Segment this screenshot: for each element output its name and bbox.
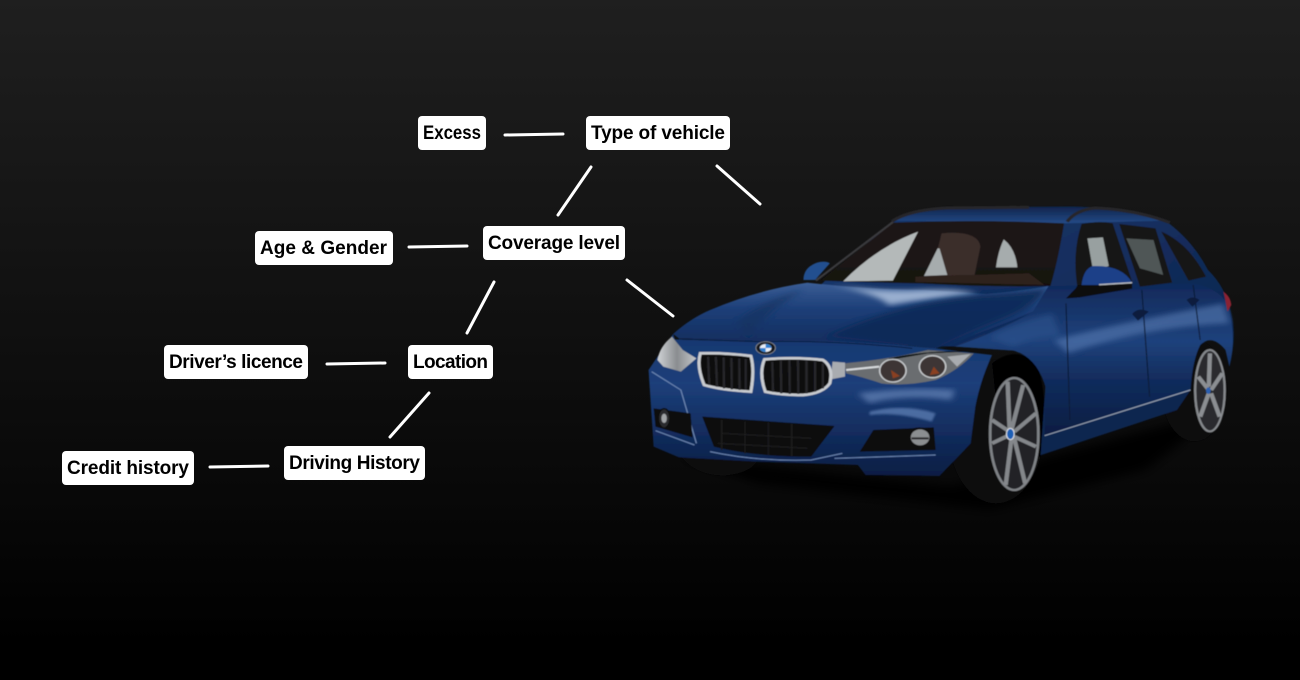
fender reflection (990, 313, 1060, 347)
hood crease shade (737, 290, 803, 337)
tail light (1224, 292, 1231, 312)
lower grille (702, 417, 835, 457)
front-left tyre (681, 457, 757, 475)
connector lines (210, 134, 760, 467)
badge (756, 342, 775, 354)
hood lip (679, 339, 912, 348)
car body silhouette (757, 207, 1234, 455)
side windows (1075, 222, 1206, 288)
side sill stripe (1045, 390, 1190, 436)
hood (673, 283, 1048, 348)
left headlight (658, 337, 696, 372)
label: Driving History (284, 446, 425, 480)
front tyre and wheel arch (949, 354, 1045, 503)
label: Location: Location (413, 352, 488, 373)
kidney grille left (699, 353, 753, 392)
label: Credit history: Credit history (67, 458, 189, 479)
right mirror (1066, 266, 1132, 298)
ground shadow (679, 410, 1224, 510)
illustration: blue estate car (648, 206, 1234, 494)
label: Excess (418, 116, 486, 150)
front fascia (649, 334, 992, 476)
label: Age & Gender: Age & Gender (260, 238, 388, 259)
sunshade reflection (843, 232, 918, 281)
roof rails (892, 207, 1170, 223)
label: Coverage level: Coverage level (488, 233, 620, 254)
right headlight (844, 350, 974, 384)
seats (926, 233, 980, 276)
bumper highlight (858, 389, 955, 403)
door handles (1132, 298, 1199, 321)
hood shaded right panel (827, 288, 1047, 348)
kidney grille right (762, 358, 831, 395)
sill (1041, 390, 1190, 455)
label: Credit history (62, 451, 194, 485)
label: Excess: Excess (423, 123, 481, 144)
door shut lines (1066, 285, 1200, 420)
left mirror (803, 262, 830, 280)
label: Driving History: Driving History (289, 453, 420, 474)
rear rim (1195, 350, 1225, 431)
label: Driver's licence: Driver’s licence (169, 352, 303, 373)
label: Location (408, 345, 493, 379)
label: Type of vehicle: Type of vehicle (591, 123, 725, 144)
body side (955, 283, 1233, 435)
label: Age & Gender (255, 231, 393, 265)
rear tyre (1162, 340, 1227, 441)
label: Type of vehicle (586, 116, 730, 150)
hood highlight (827, 284, 978, 305)
left fog lamp intake (654, 408, 693, 437)
label: Driver's licence (164, 345, 308, 379)
bumper crease (652, 372, 696, 443)
A-pillar edge (816, 222, 893, 281)
roof (893, 207, 1165, 223)
right fog lamp intake (860, 427, 936, 452)
front rim (990, 378, 1038, 490)
label: Coverage level (483, 226, 625, 260)
side reflection (1054, 303, 1229, 353)
chrome strip beside grille (831, 362, 845, 379)
windscreen (816, 221, 1064, 286)
